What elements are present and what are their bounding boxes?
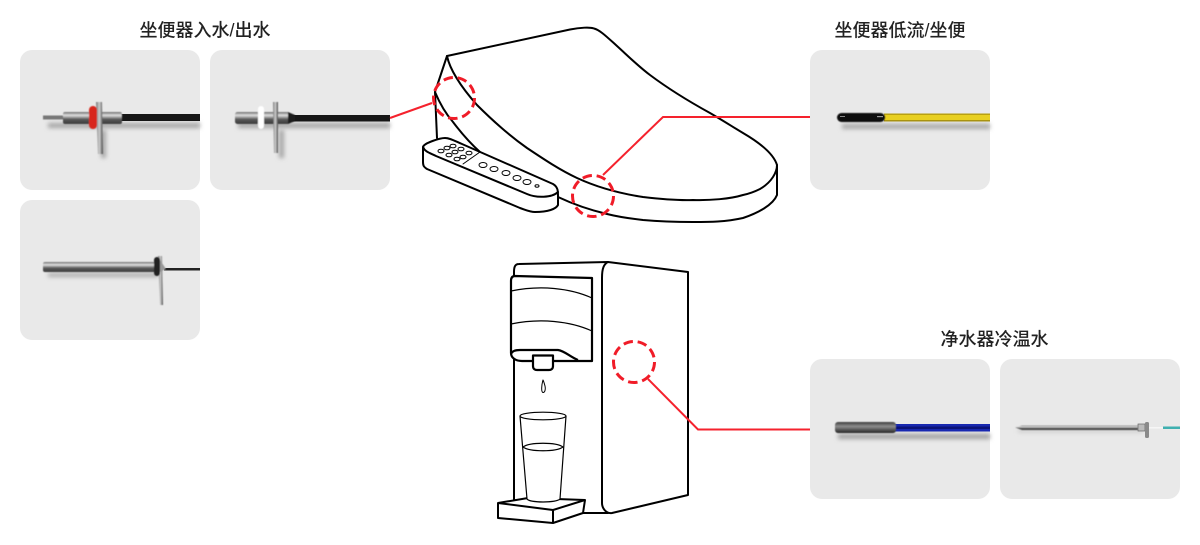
illustration: water purifier bbox=[498, 262, 688, 523]
callout circle: purifier side bbox=[614, 342, 654, 382]
panel: sensor with red ring bbox=[20, 50, 200, 190]
leader line: purifier to cold/warm panels bbox=[648, 379, 810, 430]
toilet seat side rim bbox=[558, 165, 777, 222]
panel: long steel sensor bbox=[20, 200, 200, 340]
heading: toilet seat inlet/outlet: 坐便器入水/出水 bbox=[139, 20, 271, 40]
leader line: toilet seat to low-flow panel bbox=[603, 117, 810, 175]
spout bbox=[533, 356, 553, 370]
remote panel bbox=[423, 138, 558, 212]
hinge column bbox=[435, 56, 480, 152]
callout circle: hinge bbox=[434, 78, 474, 118]
panel: sensor with white ring bbox=[210, 50, 390, 190]
water glass bbox=[520, 412, 566, 502]
heading: water purifier cold/warm water: 净水器冷温水 bbox=[940, 330, 1048, 350]
dispenser head bbox=[511, 276, 592, 361]
callout circle: seat rim bbox=[572, 176, 614, 216]
heading: toilet seat low flow: 坐便器低流/坐便 bbox=[834, 20, 966, 40]
purifier back body bbox=[514, 262, 608, 513]
leader line: toilet side to inlet panels bbox=[390, 103, 432, 118]
water drop bbox=[542, 380, 545, 392]
illustration: toilet seat bbox=[423, 28, 777, 222]
drip tray bbox=[498, 498, 585, 523]
panel: needle sensor bbox=[1000, 359, 1180, 499]
toilet seat lid bbox=[447, 28, 777, 200]
panel: blue wire sensor bbox=[810, 359, 990, 499]
panel: yellow wire sensor bbox=[810, 50, 990, 190]
purifier side panel bbox=[602, 262, 688, 513]
